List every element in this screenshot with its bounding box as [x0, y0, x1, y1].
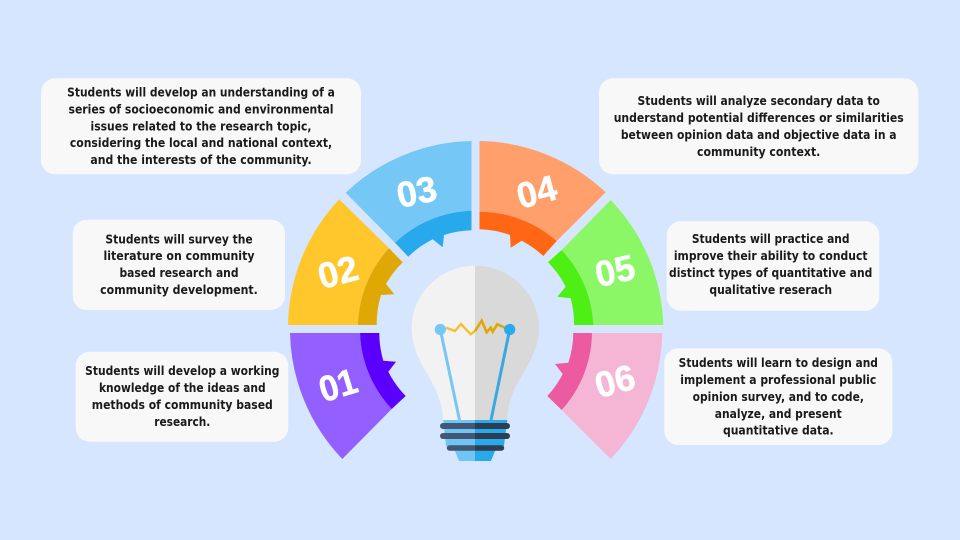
bulb glass	[412, 266, 539, 420]
panel: outcome 3 text: series of socioeconomic and environmental	[68, 102, 334, 116]
panel: outcome 3 text: considering the local and national context,	[70, 136, 332, 150]
panel: outcome 2 text: based research and	[120, 266, 238, 280]
panel: outcome 1 text: Students will develop a working	[85, 364, 279, 378]
wires and filament	[435, 321, 515, 420]
segment 05: 05	[591, 246, 639, 295]
panel: outcome 6 text: analyze, and present	[715, 407, 842, 421]
segment 01	[290, 333, 406, 459]
segment 06	[547, 333, 662, 459]
panel: outcome 5 text: distinct types of quantitative and	[669, 266, 872, 280]
panel: outcome 2 text: Students will survey the	[105, 232, 253, 246]
segment 04	[480, 141, 606, 256]
icon: light bulb	[412, 266, 539, 461]
panel: outcome 3 text: and the interests of the community.	[90, 153, 312, 167]
panel: outcome 6 text: Students will learn to design and	[679, 356, 878, 370]
panel: outcome 5 text: improve their ability to conduct	[674, 249, 868, 263]
segment 05	[548, 200, 663, 325]
panel: outcome 4 text: between opinion data and objective data in a	[621, 128, 897, 142]
panel: outcome 6 text: implement a professional public	[680, 373, 876, 387]
panel: outcome 6 text: quantitative data.	[723, 424, 834, 438]
panel: outcome 4 text	[599, 78, 918, 174]
panel: outcome 2 text: literature on community	[104, 249, 254, 263]
panel: outcome 1 text: research.	[154, 415, 210, 429]
panel: outcome 4 text: understand potential differences or similarities	[614, 111, 904, 125]
segment 04: 04	[512, 167, 561, 217]
segment 01: 01	[314, 360, 362, 410]
panel: outcome 3 text: issues related to the research topic,	[90, 119, 312, 133]
panel: outcome 1 text: methods of community based	[92, 398, 273, 412]
panel: outcome 1 text: knowledge of the ideas and	[99, 381, 266, 395]
panel: outcome 6 text	[664, 348, 892, 445]
panel: outcome 3 text	[41, 78, 361, 174]
panel: outcome 5 text: qualitative reserach	[709, 283, 832, 297]
panel: outcome 1 text	[76, 352, 288, 442]
segment 06: 06	[590, 356, 640, 406]
panel: outcome 5 text: Students will practice and	[692, 232, 850, 246]
panel: outcome 2 text: community development.	[100, 283, 258, 297]
screw base	[440, 420, 510, 461]
panel: outcome 4 text: Students will analyze secondary data to	[638, 94, 880, 108]
panel: outcome 3 text: Students will develop an understanding of a	[67, 86, 335, 100]
segment 02	[288, 199, 403, 325]
panel: outcome 2 text	[73, 220, 285, 310]
panel: outcome 6 text: opinion survey, and to code,	[693, 390, 864, 404]
segment 03	[346, 141, 472, 257]
panel: outcome 5 text	[667, 221, 879, 311]
panel: outcome 4 text: community context.	[697, 145, 820, 159]
segment 02: 02	[313, 247, 363, 297]
segment 03: 03	[393, 167, 441, 216]
